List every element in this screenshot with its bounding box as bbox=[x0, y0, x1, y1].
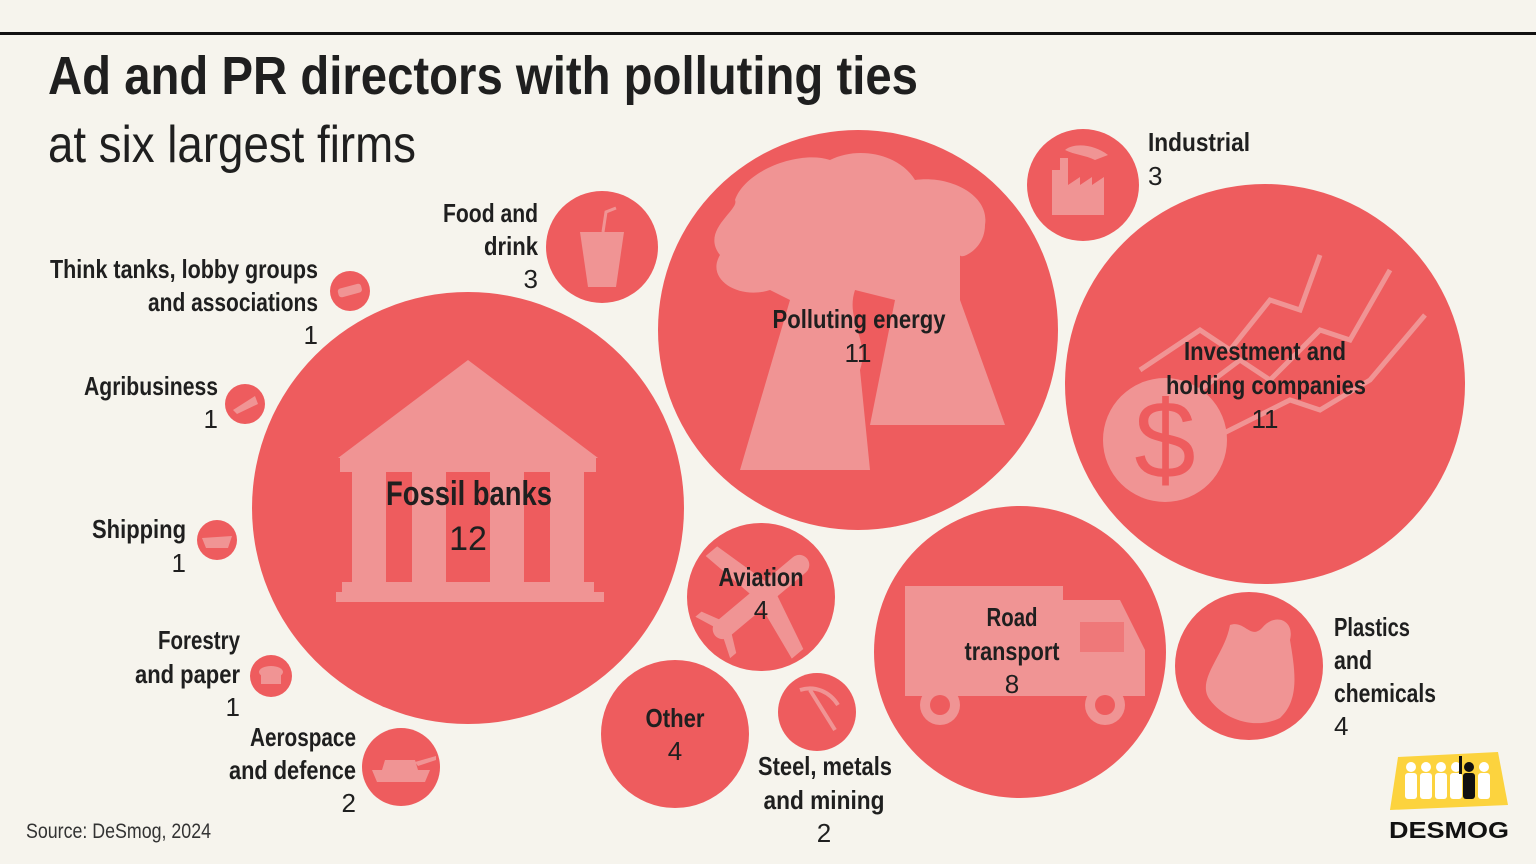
bubble: aerospace bbox=[229, 722, 440, 818]
bubble: forestry: and paper bbox=[135, 659, 240, 689]
bubble: forestry: 1 bbox=[226, 692, 240, 722]
logo: desmog bbox=[1389, 752, 1509, 843]
bubble: industrial: Industrial bbox=[1148, 127, 1250, 157]
bubble: forestry bbox=[135, 625, 292, 722]
bubble: food and drink bbox=[443, 191, 658, 303]
subtitle: at six largest firms bbox=[48, 116, 416, 174]
bubble: agribusiness bbox=[84, 371, 265, 434]
bubble: steel bbox=[758, 673, 892, 848]
logo: desmog: DESMOG bbox=[1389, 817, 1509, 843]
bubble: polluting energy bbox=[658, 130, 1058, 530]
bubble: polluting energy: 11 bbox=[844, 338, 872, 368]
bubble: investment: Investment and bbox=[1184, 336, 1346, 366]
bubble: think tanks: 1 bbox=[304, 320, 318, 350]
bubble: road transport: Road bbox=[986, 602, 1038, 632]
bubble: shipping: 1 bbox=[172, 548, 186, 578]
bubble: fossil banks: 12 bbox=[449, 520, 487, 558]
bubble: steel: 2 bbox=[817, 818, 831, 848]
bubble: aviation: 4 bbox=[754, 595, 768, 625]
source: Source: DeSmog, 2024 bbox=[26, 820, 211, 843]
bubble: think tanks: and associations bbox=[148, 287, 318, 317]
bubble: aviation: Aviation bbox=[718, 562, 804, 592]
title: Ad and PR directors with polluting ties bbox=[48, 46, 918, 106]
bubble: food and drink: drink bbox=[484, 231, 538, 261]
icon: truck bbox=[905, 586, 1145, 725]
bubble: food and drink: 3 bbox=[524, 264, 538, 294]
bubble: steel: Steel, metals bbox=[758, 751, 892, 781]
icon: plane bbox=[670, 507, 850, 689]
bubble: plastics: 4 bbox=[1334, 711, 1348, 741]
bubble: aviation bbox=[670, 507, 850, 689]
bubble: think tanks: Think tanks, lobby groups bbox=[50, 254, 318, 284]
bubble: agribusiness: Agribusiness bbox=[84, 371, 218, 401]
bubble: plastics bbox=[1175, 592, 1436, 741]
bubble: think tanks bbox=[50, 254, 370, 350]
icon: factory bbox=[1052, 145, 1108, 215]
bubble: fossil banks: Fossil banks bbox=[386, 475, 552, 513]
bubble: other: Other bbox=[646, 703, 704, 733]
icon: bank bbox=[336, 360, 604, 602]
bubble: industrial bbox=[1027, 127, 1250, 241]
icon: cup bbox=[580, 232, 624, 287]
icon: cooling towers bbox=[714, 153, 1005, 470]
bubble: aerospace: Aerospace bbox=[250, 722, 356, 752]
bubble: investment: $ bbox=[1134, 379, 1196, 502]
bubble: fossil banks bbox=[252, 292, 684, 724]
bubble: shipping: Shipping bbox=[92, 514, 186, 544]
bubble: investment: holding companies bbox=[1166, 370, 1366, 400]
bubble: agribusiness: 1 bbox=[204, 404, 218, 434]
bubble: plastics: and bbox=[1334, 645, 1372, 675]
bubble: forestry: Forestry bbox=[158, 625, 240, 655]
bubble: other bbox=[601, 660, 749, 808]
bubble: food and drink: Food and bbox=[443, 198, 538, 228]
icon: dollar and arrows bbox=[1140, 255, 1425, 440]
bubble: road transport: transport bbox=[964, 636, 1060, 666]
bubble: industrial: 3 bbox=[1148, 161, 1162, 191]
bubble: other: 4 bbox=[668, 736, 682, 766]
bubble: road transport bbox=[874, 506, 1166, 798]
bubble: road transport: 8 bbox=[1005, 669, 1019, 699]
bubble: investment bbox=[1065, 184, 1465, 584]
bubble: plastics: Plastics bbox=[1334, 612, 1410, 642]
bubble: shipping bbox=[92, 514, 237, 578]
bubble: investment: 11 bbox=[1252, 404, 1278, 434]
bubble: plastics: chemicals bbox=[1334, 678, 1436, 708]
bubble: aerospace: and defence bbox=[229, 755, 356, 785]
bubble: polluting energy: Polluting energy bbox=[772, 304, 946, 334]
bubble: aerospace: 2 bbox=[342, 788, 356, 818]
bubble: steel: and mining bbox=[764, 785, 884, 815]
